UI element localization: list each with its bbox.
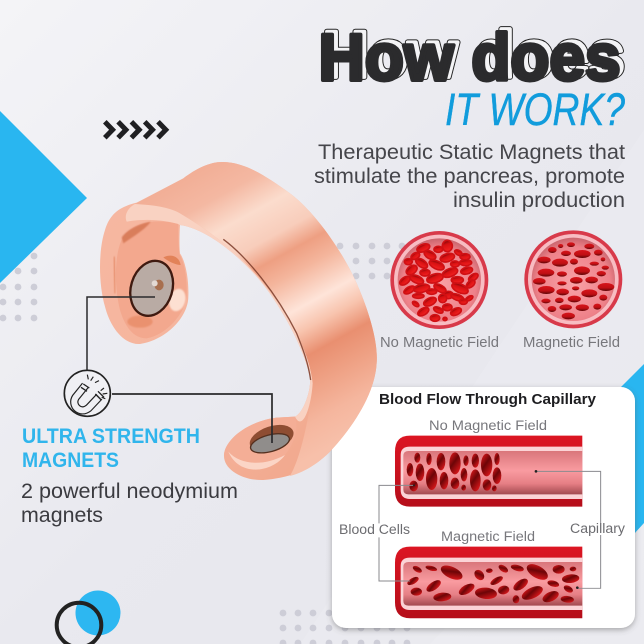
dot pattern: left [0, 253, 37, 321]
magnet: lower [246, 420, 297, 457]
capillary tube: magnetic field [395, 547, 582, 618]
lobe highlights [127, 316, 153, 328]
left lobe inner surface [116, 221, 187, 338]
title: How does: How does [319, 20, 621, 94]
heading: ultra strength magnets: ULTRA STRENGTH [22, 425, 200, 448]
connector lines [379, 470, 601, 589]
circle: no magnetic field [390, 231, 488, 329]
icon: horseshoe magnet [64, 370, 110, 416]
circle: magnetic field [524, 230, 622, 328]
callout lines [87, 297, 272, 443]
heading: magnetic field: Magnetic Field [441, 529, 535, 544]
label: capillary: Capillary [570, 521, 625, 536]
band outer face [135, 162, 377, 476]
panel: blood flow through capillary [332, 387, 635, 628]
dot pattern: bottom [280, 610, 410, 644]
blue triangle: left [0, 111, 87, 283]
heading: ultra strength magnets: MAGNETS [22, 449, 119, 472]
label: no magnetic field: No Magnetic Field [380, 335, 499, 351]
label: magnetic field: Magnetic Field [523, 335, 620, 351]
text: magnets description: magnets [21, 504, 103, 527]
heading: no magnetic field: No Magnetic Field [429, 418, 547, 433]
label: blood cells: Blood Cells [339, 522, 410, 537]
capillary tube: no magnetic field [395, 436, 582, 507]
description paragraph: stimulate the pancreas, promote [314, 164, 625, 188]
blue circle with black ring [57, 590, 120, 644]
card heading: Blood Flow Through Capillary [379, 392, 596, 408]
rim dark line [223, 239, 311, 380]
text: magnets description [21, 480, 238, 527]
card background [332, 387, 635, 628]
lower lobe [224, 417, 296, 468]
description paragraph: insulin production [453, 188, 625, 212]
dot pattern: middle [337, 243, 405, 279]
ring silhouette [100, 162, 377, 480]
blue shape: right behind card [600, 364, 644, 555]
chevron arrows [105, 122, 166, 138]
copper magnetic ring [100, 162, 377, 480]
heading: ultra strength magnets [22, 425, 200, 472]
title: How does: How does [323, 17, 625, 91]
rim [126, 204, 313, 421]
description paragraph: Therapeutic Static Magnets that [318, 140, 625, 164]
description paragraph [314, 140, 625, 212]
magnet: upper [124, 256, 180, 321]
text: magnets description: 2 powerful neodymium [21, 480, 238, 503]
title: How does: How does [323, 17, 625, 91]
